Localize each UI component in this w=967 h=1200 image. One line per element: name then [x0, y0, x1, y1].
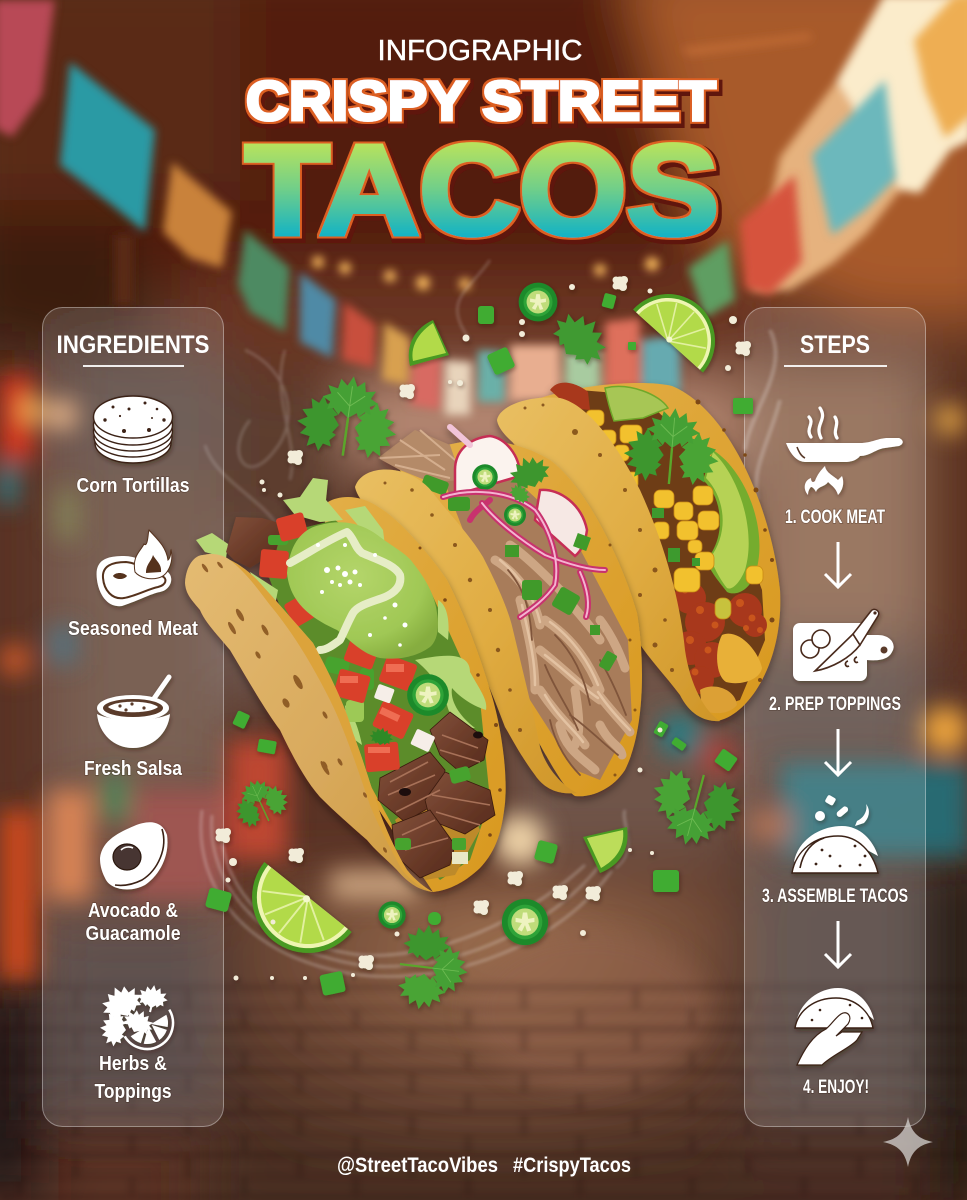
icon: enjoy: [795, 988, 874, 1065]
cilantro sprigs: [292, 369, 404, 463]
icon: avocado: [100, 822, 168, 889]
green bits: [268, 535, 471, 850]
label: avocado and guacamole: [86, 900, 180, 945]
label: seasoned meat: Seasoned Meat: [68, 618, 198, 640]
back shell: [400, 441, 642, 796]
heading: steps: STEPS: [800, 331, 870, 359]
icon: corn tortillas: [94, 396, 172, 463]
lime wedge: top right: [632, 275, 734, 373]
cilantro on taco 2: [504, 450, 554, 495]
cobblestones: [0, 985, 967, 1200]
filling base: [255, 520, 490, 880]
crumbled cheese: [216, 276, 751, 980]
cheese on guacamole: [316, 543, 408, 647]
crema: [290, 532, 400, 650]
taco 1: carne asada: [185, 478, 506, 892]
panel: steps: [744, 308, 926, 1126]
footer handles: #CrispyTacos: [513, 1154, 631, 1177]
lettuce: [196, 478, 486, 745]
icon: seasoned meat: [97, 530, 172, 606]
icon: prep toppings: [793, 609, 894, 681]
taco 3: corn and chorizo: [497, 383, 780, 721]
label: fresh salsa: Fresh Salsa: [84, 758, 183, 780]
cream awning, top right: [680, 0, 967, 290]
steak chunks: [378, 712, 495, 878]
meat clusters: [673, 582, 767, 694]
heading: ingredients: INGREDIENTS: [56, 331, 210, 359]
icon: assemble tacos: [792, 795, 878, 873]
label: step 3: 3. ASSEMBLE TACOS: [762, 886, 908, 907]
tomatoes: [259, 512, 418, 772]
top left steak: [226, 517, 283, 568]
bunting flags: [0, 0, 967, 415]
flying garnishes: [205, 275, 753, 1015]
meat top: [550, 383, 590, 410]
back shell: [497, 383, 780, 721]
lime wedge: top small: [409, 320, 449, 366]
label: herbs and toppings: [94, 1053, 172, 1103]
label: step 4: 4. ENJOY!: [803, 1077, 869, 1098]
red onions: [443, 492, 605, 617]
pork strands: [495, 545, 630, 770]
avocado top: [605, 386, 668, 421]
title kicker: INFOGRAPHIC: [378, 35, 582, 67]
label: corn tortillas: Corn Tortillas: [76, 475, 190, 497]
avocado slice: [703, 450, 759, 593]
icon: cook meat: [786, 408, 903, 495]
taco 2: pulled pork: [355, 427, 642, 796]
small cilantro: [368, 726, 395, 747]
front shell: [355, 470, 577, 793]
front shell: [497, 397, 720, 721]
cilantro garnish: [621, 404, 724, 488]
green toppings: [420, 474, 618, 672]
filling base: [440, 465, 632, 780]
label: herbs and toppings: Toppings: [94, 1081, 172, 1103]
icon: herbs and lime: [96, 979, 183, 1059]
title line: crispy street: CRISPY STREET: [246, 69, 716, 132]
label: avocado and guacamole: Avocado &: [88, 900, 178, 922]
jalapeno slice: [407, 674, 449, 716]
title block: [245, 35, 719, 262]
radishes: [455, 436, 520, 495]
label: avocado and guacamole: Guacamole: [86, 923, 180, 945]
guacamole: [287, 522, 438, 659]
corn kernels: [586, 410, 763, 619]
label: step 1: 1. COOK MEAT: [785, 507, 885, 528]
arrow: step 1 to 2: [825, 542, 851, 587]
jalapeno slices: [519, 283, 557, 321]
front shell: [185, 554, 433, 892]
icon: fresh salsa: [97, 677, 170, 748]
panel: ingredients: [42, 308, 224, 1126]
arrow: step 3 to 4: [825, 921, 851, 967]
footer handles: [337, 1154, 631, 1177]
label: step 2: 2. PREP TOPPINGS: [769, 694, 901, 715]
title line: tacos: TACOS: [245, 119, 719, 262]
pork top left: [378, 430, 462, 482]
label: herbs and toppings: Herbs &: [99, 1053, 167, 1075]
filling base: [555, 388, 765, 712]
pepper pieces: [205, 293, 753, 996]
footer handles: @StreetTacoVibes: [337, 1154, 498, 1177]
smoke swirls: [201, 260, 780, 977]
lime wedge: bottom small: [583, 827, 628, 873]
potatoes: [717, 634, 762, 683]
lime wedge: bottom left: [229, 861, 352, 976]
icon: sparkle watermark: [883, 1117, 933, 1167]
arrow: step 2 to 3: [825, 729, 851, 775]
back shell: [300, 497, 506, 892]
